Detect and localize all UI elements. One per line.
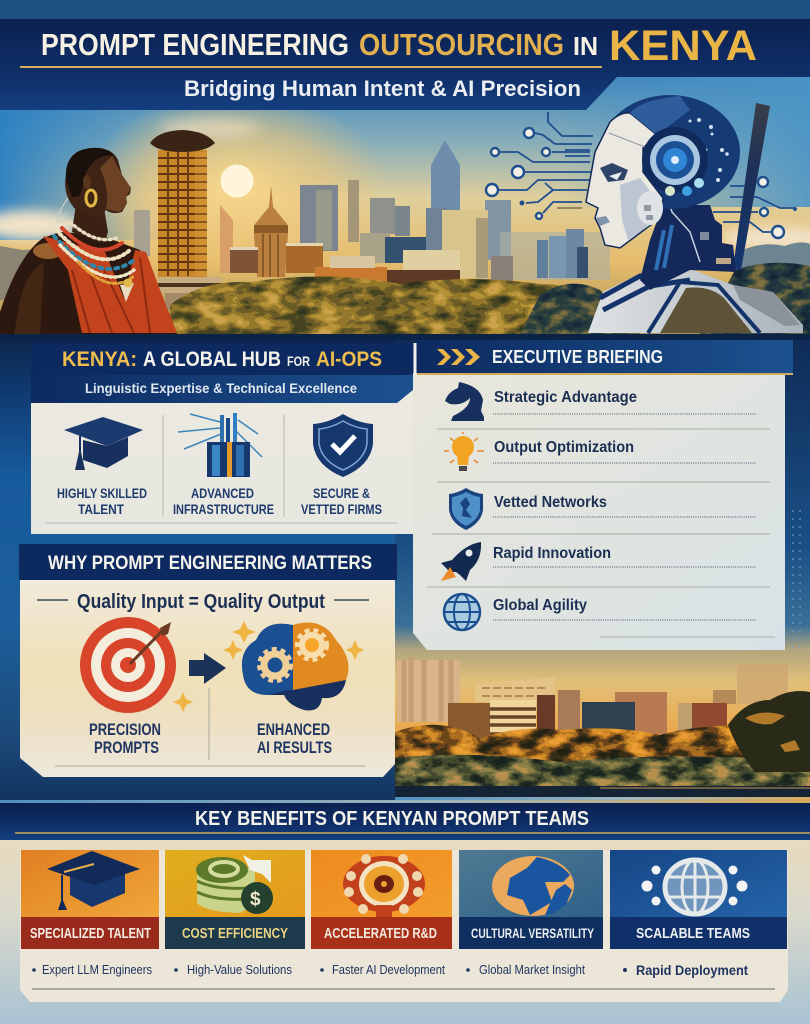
label: advanced infrastructure (173, 485, 274, 517)
heading bar: FOR (287, 353, 310, 369)
card: accelerated R&D (311, 850, 452, 977)
label: enhanced AI results: ENHANCED (257, 721, 330, 739)
icon: coins and money bag: $ (250, 889, 261, 910)
label: advanced infrastructure: INFRASTRUCTURE (173, 501, 274, 517)
tree canopy (170, 276, 640, 334)
heading bar (19, 544, 397, 580)
panel: key benefits (0, 800, 810, 1024)
neck and head (72, 204, 108, 244)
item: global agility: Global Agility (493, 597, 587, 614)
illustration: robot head with circuit lines (486, 95, 803, 333)
label: secure and vetted firms (301, 485, 382, 517)
icon: graduation cap (47, 851, 140, 910)
card: specialized talent: SPECIALIZED TALENT (30, 926, 151, 942)
label: enhanced AI results (257, 721, 332, 757)
icon: shield with check (313, 414, 373, 477)
subtitle: Bridging Human Intent & AI Precision (184, 76, 581, 101)
right tree (728, 691, 810, 772)
card: cost efficiency: High-Value Solutions (187, 962, 292, 977)
card: scalable teams: Rapid Deployment (636, 962, 748, 978)
red robe (43, 236, 177, 333)
clouds (0, 119, 810, 250)
left tower cluster (397, 660, 460, 722)
gold rule (20, 66, 602, 68)
face (586, 113, 663, 248)
card: cultural versatility (459, 850, 603, 977)
arrow (189, 653, 226, 684)
middle section background (0, 334, 810, 804)
heading band: KEY BENEFITS OF KENYAN PROMPT TEAMS (195, 808, 589, 830)
heading band (0, 800, 810, 840)
distant skyline (0, 140, 610, 300)
heading bar: WHY PROMPT ENGINEERING MATTERS (48, 553, 372, 574)
icon: brain with gears (242, 623, 348, 710)
main title: PROMPT ENGINEERING (41, 27, 349, 62)
label: secure and vetted firms: VETTED FIRMS (301, 501, 382, 517)
card: cultural versatility: Global Market Insight (479, 962, 585, 977)
landmark tower (150, 130, 222, 310)
label: highly skilled talent (57, 485, 147, 517)
icon: chevrons (437, 349, 480, 365)
icon: target with arrow (80, 617, 176, 713)
icon: earth globe (492, 856, 574, 916)
card: scalable teams (610, 850, 787, 978)
icon: graduation cap (64, 417, 143, 470)
concentric sensor (642, 127, 708, 193)
far hills (735, 242, 810, 300)
main title: KENYA (609, 22, 757, 70)
subheading bar (31, 375, 413, 403)
main title: IN (573, 31, 598, 61)
neck (640, 205, 736, 290)
heading bar (415, 340, 793, 375)
bead necklaces (54, 222, 134, 283)
heading bar (31, 343, 413, 375)
label: precision prompts (89, 721, 161, 757)
label: advanced infrastructure: ADVANCED (191, 485, 254, 501)
label: secure and vetted firms: SECURE & (313, 485, 370, 501)
page background: top strip (0, 0, 810, 120)
item: vetted networks: Vetted Networks (494, 494, 607, 511)
item: rapid innovation (441, 542, 611, 581)
panel: why prompt engineering matters (19, 544, 397, 777)
lower-right skyline (395, 658, 810, 800)
label: enhanced AI results: AI RESULTS (257, 739, 332, 757)
ear panel (637, 191, 663, 225)
label: highly skilled talent: TALENT (78, 501, 124, 517)
card: cost efficiency (165, 850, 305, 977)
main title (41, 22, 757, 70)
card: cultural versatility: CULTURAL VERSATILITY (471, 925, 594, 941)
label: precision prompts: PRECISION (89, 721, 161, 739)
item: strategic advantage: Strategic Advantage (494, 389, 637, 406)
item: rapid innovation: Rapid Innovation (493, 545, 611, 562)
foliage layers (395, 724, 810, 800)
quality equation: Quality Input = Quality Output (77, 591, 325, 613)
label: precision prompts: PROMPTS (94, 739, 159, 757)
panel: Kenya global hub (31, 343, 413, 534)
benefits panel surface (20, 850, 788, 1002)
sparkles (173, 621, 364, 712)
label: highly skilled talent: HIGHLY SKILLED (57, 485, 147, 501)
heading bar: AI-OPS (316, 348, 382, 371)
card: cost efficiency: COST EFFICIENCY (182, 926, 288, 942)
icon: gear wheel (343, 854, 425, 917)
illustration: Maasai man (0, 148, 177, 334)
card: specialized talent (21, 850, 159, 977)
item: strategic advantage (445, 382, 637, 421)
heading bar: A GLOBAL HUB (143, 348, 281, 371)
card: accelerated R&D: Faster AI Development (332, 962, 445, 977)
subheading bar: Linguistic Expertise & Technical Excellence (85, 380, 357, 396)
main title: OUTSOURCING (359, 27, 564, 62)
shoulders (588, 265, 803, 333)
circuit lines (498, 112, 795, 232)
item: output optimization: Output Optimization (494, 439, 634, 456)
item: vetted networks (449, 488, 607, 530)
hero scene (0, 77, 810, 334)
decorative dot column (793, 510, 800, 650)
sun (220, 164, 254, 198)
icon: network globe (642, 860, 748, 914)
antenna (733, 103, 770, 270)
status nodes (665, 186, 675, 196)
card: specialized talent: Expert LLM Engineers (42, 962, 152, 977)
panel: executive briefing (413, 340, 793, 650)
heading bar: KENYA: (62, 348, 137, 371)
icon: infrastructure towers (178, 413, 262, 477)
card: accelerated R&D: ACCELERATED R&D (324, 926, 437, 942)
earring (86, 190, 96, 206)
heading bar: EXECUTIVE BRIEFING (492, 347, 663, 367)
title banner (0, 19, 810, 110)
back of head (600, 95, 740, 209)
card: scalable teams: SCALABLE TEAMS (636, 925, 750, 942)
midtown buildings (220, 185, 488, 287)
item: global agility (444, 594, 587, 630)
item: output optimization (444, 432, 634, 471)
